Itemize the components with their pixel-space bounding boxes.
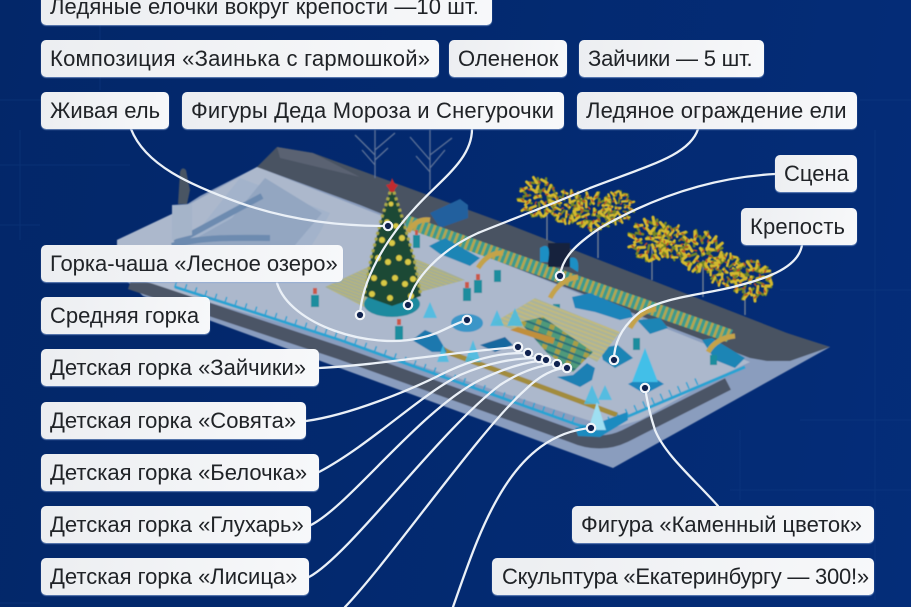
label: fawn — [449, 40, 567, 77]
sculpture Ekaterinburgu 300 — [575, 402, 628, 437]
label: stage — [775, 155, 857, 192]
label: squirrel slide — [41, 454, 319, 491]
blue building at wall — [430, 199, 468, 228]
label: middle slide: Средняя горка — [50, 303, 199, 328]
base slab — [117, 167, 830, 468]
label: Ded Moroz figures: Фигуры Деда Мороза и Снегурочки — [191, 98, 554, 123]
bowl slide Lesnoe ozero — [451, 314, 483, 332]
label: grouse slide — [41, 506, 311, 543]
bare trees behind — [355, 130, 452, 190]
label: fortress: Крепость — [750, 214, 845, 239]
statue on pedestal — [172, 168, 192, 240]
label: owlets slide: Детская горка «Совята» — [50, 408, 296, 433]
label: Zainka composition — [41, 40, 439, 77]
leader lines — [131, 129, 802, 607]
label: live fir — [41, 92, 169, 129]
ice fence of the fir — [405, 215, 733, 342]
small ice firs — [423, 302, 612, 404]
ice fence — [175, 284, 745, 427]
figure Stone flower — [628, 348, 664, 394]
isometric plaza scene — [117, 130, 830, 468]
label: Ded Moroz figures — [182, 92, 564, 129]
label: bunnies slide: Детская горка «Зайчики» — [50, 355, 306, 380]
middle slide — [412, 330, 447, 352]
brown path of slides — [432, 336, 617, 415]
row of illuminated trees — [511, 170, 789, 317]
label: fir fence — [577, 92, 857, 129]
label: bunnies slide — [41, 349, 319, 386]
label: live fir: Живая ель — [50, 98, 160, 123]
plaza surface — [117, 167, 750, 428]
label: fawn: Олененок — [458, 46, 558, 71]
leader dots — [356, 222, 649, 432]
label: owlets slide — [41, 402, 306, 439]
left lawn panel — [150, 178, 330, 280]
stage — [540, 243, 633, 320]
label: bunnies: Зайчики — 5 шт. — [588, 46, 752, 71]
label: stage: Сцена — [784, 161, 849, 186]
label: fox slide — [41, 558, 309, 595]
label: forest lake slide — [41, 245, 343, 282]
statue shadow cross — [172, 196, 270, 246]
label: middle slide — [41, 297, 210, 334]
dark back wall — [257, 147, 830, 361]
label: sculpture — [492, 558, 874, 595]
fir tree — [364, 178, 421, 317]
label: Zainka composition: Композиция «Заинька с гармошкой» — [50, 46, 430, 71]
front road — [130, 283, 728, 442]
ice rink lattice near tree — [325, 252, 465, 310]
rink with slides — [480, 298, 620, 387]
decorative teal blocks — [429, 238, 745, 368]
label: bunnies — [579, 40, 764, 77]
label: fox slide: Детская горка «Лисица» — [50, 564, 297, 589]
label: squirrel slide: Детская горка «Белочка» — [50, 460, 307, 485]
label: fir fence: Ледяное ограждение ели — [586, 98, 847, 123]
golden arches — [408, 220, 735, 352]
label: sculpture: Скульптура «Екатеринбургу — 300!» — [502, 564, 869, 589]
teal bollards — [311, 230, 717, 365]
label: stone flower — [572, 506, 874, 543]
label: fortress — [741, 208, 857, 245]
label: forest lake slide: Горка-чаша «Лесное озеро» — [50, 251, 338, 276]
label: grouse slide: Детская горка «Глухарь» — [50, 512, 304, 537]
label: stone flower: Фигура «Каменный цветок» — [581, 512, 862, 537]
